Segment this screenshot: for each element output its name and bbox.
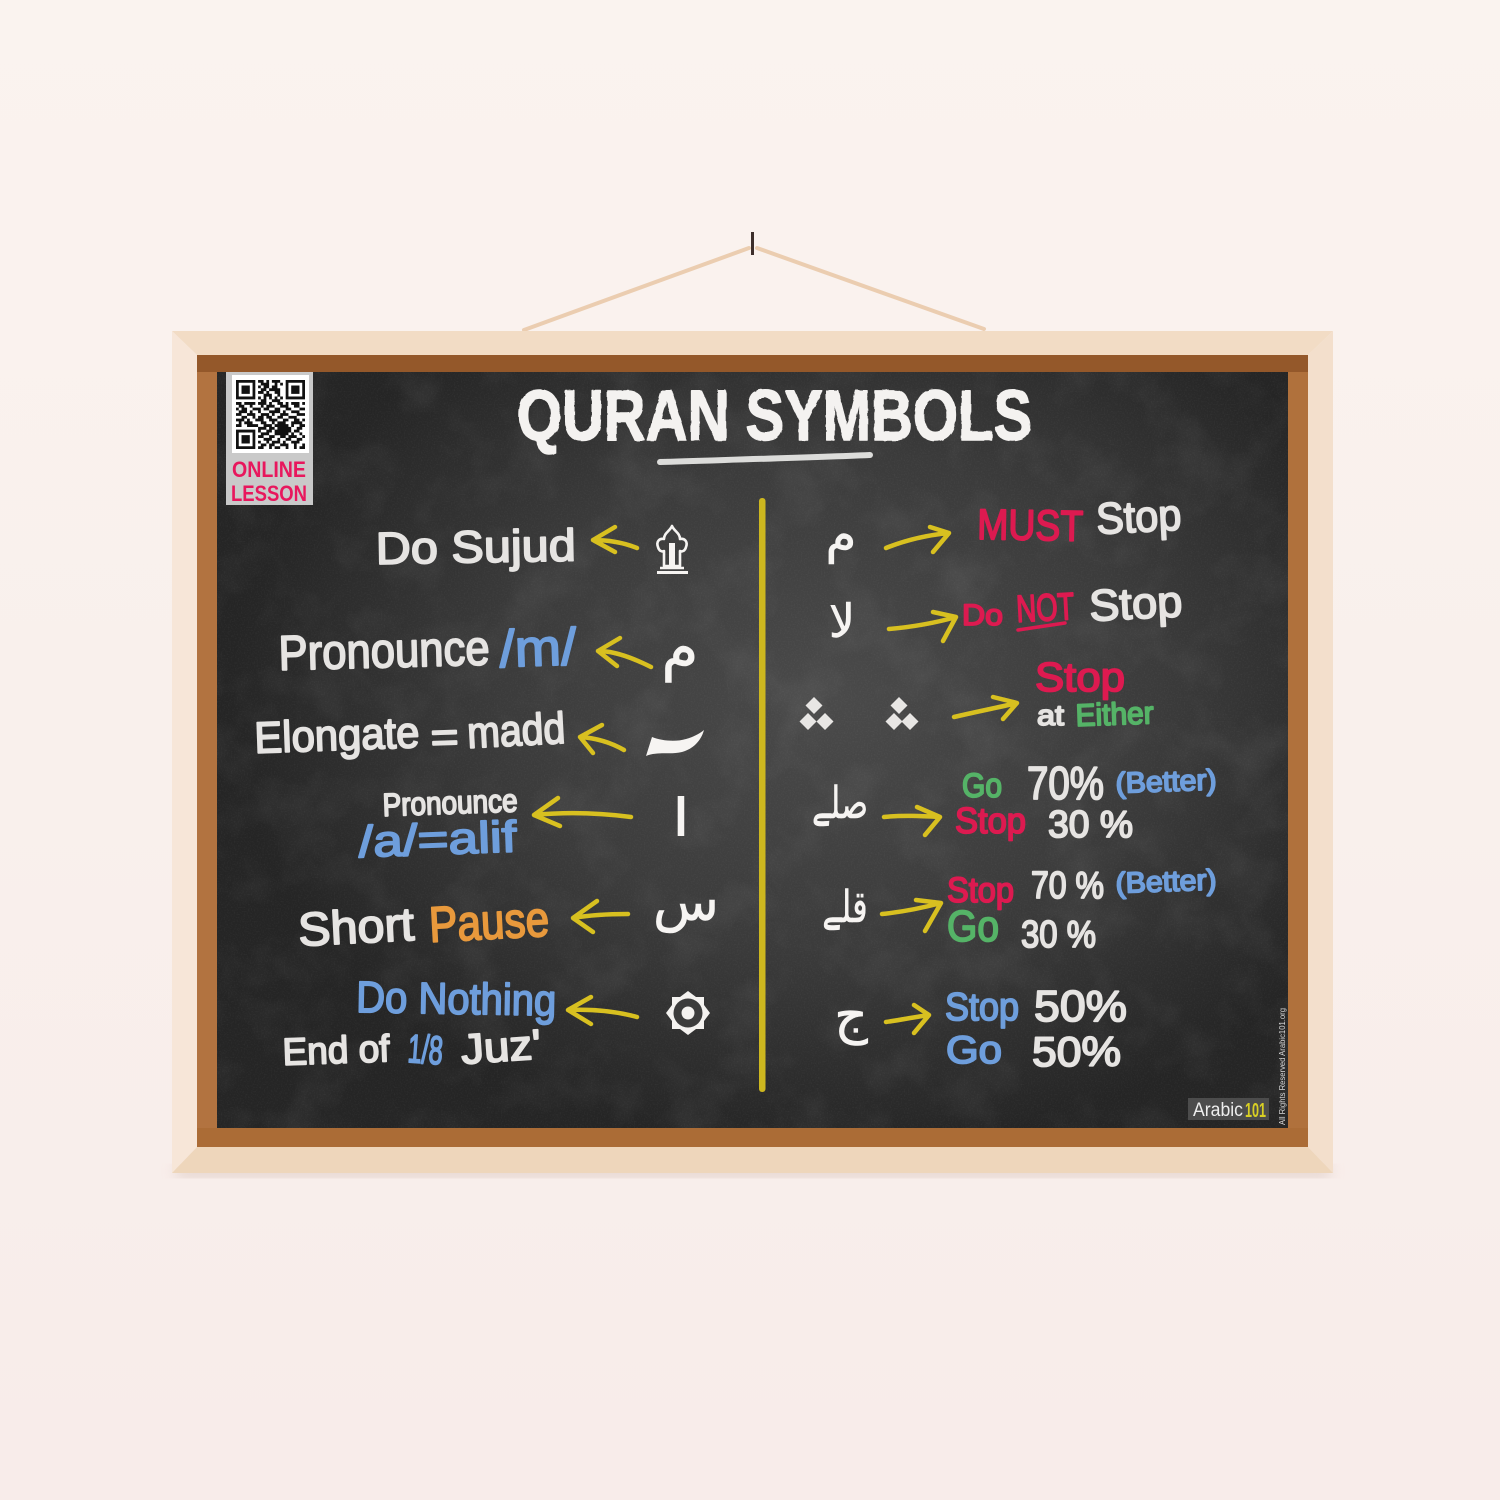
right row: stop at either [800,654,1154,733]
right row: stop 50 go 50: Stop [945,986,1019,1029]
Arabic symbol laa: لا [829,594,855,648]
online lesson label: ONLINE [232,457,306,482]
left row: elongate madd: Elongate [254,708,420,763]
right row: do not stop: NOT [1015,586,1075,631]
QR modules [236,381,305,448]
left row: short pause: Pause [428,891,550,953]
right row: stop 50 go 50 [834,982,1127,1075]
left row: elongate madd: = [430,713,459,761]
left row: pronounce m: /m/ [498,618,578,679]
Arabic101 logo: Arabic [1193,1100,1243,1121]
left row: do sujud [375,520,688,574]
right row: must stop [826,491,1182,564]
left row: elongate madd [254,704,704,763]
right row: stop 70 go 30: Go [947,902,999,951]
arrow [593,527,637,552]
icon: eighth-juz star [666,991,710,1035]
Arabic symbol meem: م [661,613,699,683]
QR code and online lesson badge [226,372,313,506]
right row: do not stop: Stop [1088,577,1183,631]
Arabic symbol qalay: قلے [822,882,868,933]
right row: go 70 stop 30: Go [962,767,1002,805]
arrow [882,900,941,931]
title: QURAN SYMBOLS [517,377,1032,456]
left row: elongate madd: madd [466,704,566,758]
left row: do nothing, end of 1/8 juz: 1/8 [406,1027,444,1073]
icon: three-dot mark [886,697,918,730]
right row: go 70 stop 30 [812,757,1217,846]
frame shadow [176,1165,1330,1177]
right row: stop 70 go 30: 70 % [1031,865,1104,907]
right row: must stop: Stop [1095,491,1182,544]
right row: stop at either: Either [1075,695,1154,733]
left row: do nothing, end of 1/8 juz [282,973,710,1074]
arrow [884,807,940,835]
online lesson label [231,457,307,506]
left row: short pause: Short [297,897,415,956]
left row: pronounce alif [358,782,688,867]
Arabic symbol meem: م [826,506,856,564]
left row: do sujud: Do Sujud [375,520,576,574]
right row: go 70 stop 30: 70% [1027,757,1104,809]
Arabic symbol seen: س [653,870,719,933]
icon: sajda arch [657,526,688,572]
right row: stop at either: Stop [1035,654,1125,700]
wooden frame [172,331,1333,1173]
central divider [759,498,766,1092]
arrow [954,697,1017,719]
Arabic symbol jeem: ج [834,986,868,1046]
Arabic101 logo: 101 [1245,1100,1266,1122]
right row: stop 70 go 30: 30 % [1021,914,1096,956]
right row: stop 70 go 30: Stop [947,871,1014,910]
copyright note: All Rights Reserved Arabic101.org [1277,1008,1287,1125]
left row: pronounce alif: Pronounce [382,782,518,823]
left row: do nothing, end of 1/8 juz: Juz' [459,1021,542,1073]
Arabic symbol salay: صلے [812,778,868,829]
right row: must stop: MUST [977,501,1084,551]
hanging rope and nail [524,232,984,330]
arrow [886,527,949,552]
arrow [568,997,637,1024]
right row: stop 50 go 50: 50% [1032,1028,1121,1075]
right row: stop 70 go 30 [822,864,1217,956]
left row: short pause [297,870,719,956]
right row: stop 50 go 50: 50% [1034,982,1127,1031]
online lesson label: LESSON [231,481,307,506]
right row: go 70 stop 30: 30 % [1048,804,1133,846]
arrow [598,638,651,667]
arrow [889,612,956,641]
arrow [573,901,628,932]
left row: pronounce alif: /a/=alif [358,812,518,867]
icon: madd sign [646,730,704,756]
left row: pronounce m [278,613,699,683]
Arabic101 logo [1188,1098,1269,1122]
right row: go 70 stop 30: Stop [955,800,1026,841]
arrow [886,1005,929,1033]
right row: stop 50 go 50: Go [946,1029,1002,1072]
left row: pronounce m: Pronounce [278,621,490,681]
right row: do not stop [829,577,1183,648]
left row: do nothing, end of 1/8 juz: Do Nothing [356,973,557,1025]
right row: do not stop: Do [962,599,1003,632]
right row: go 70 stop 30: (Better) [1115,764,1217,800]
title underline [660,455,870,462]
right row: stop at either: at [1037,700,1064,732]
arrow [580,725,624,753]
right row: stop 70 go 30: (Better) [1115,864,1217,900]
arrow [534,798,631,826]
Arabic symbol alif: ا [674,789,688,847]
chalkboard [217,372,1288,1128]
icon: three-dot mark [800,697,834,730]
underline on not [1018,623,1065,630]
left row: do nothing, end of 1/8 juz: End of [282,1028,391,1074]
